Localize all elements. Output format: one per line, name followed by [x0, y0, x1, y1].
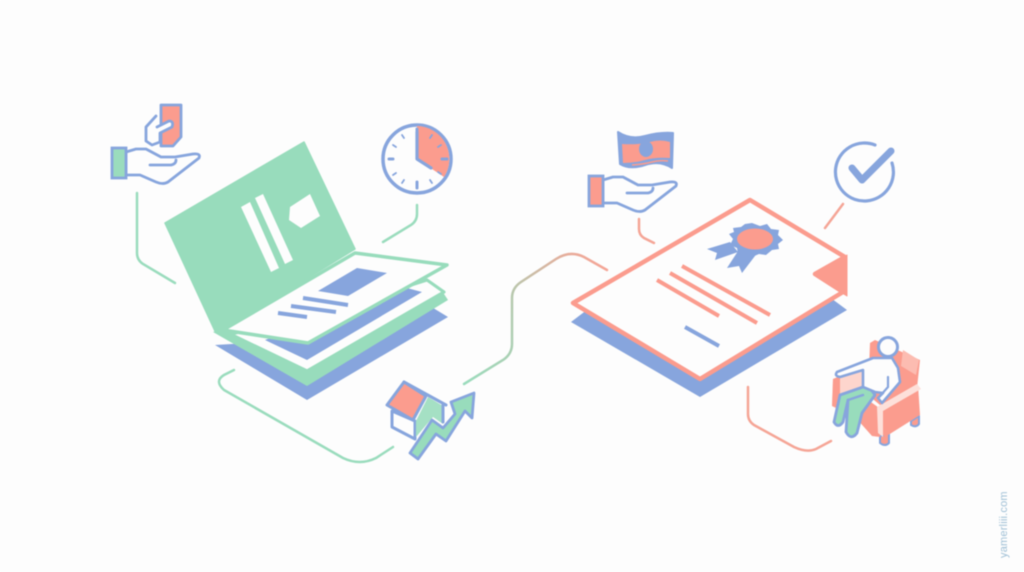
icon: clock — [383, 125, 451, 193]
connector: check to certificate — [825, 204, 843, 228]
open top page — [223, 253, 447, 343]
blue inner block — [265, 287, 422, 360]
certificate blue line — [685, 327, 719, 346]
white inner page — [230, 280, 444, 371]
card — [161, 105, 181, 146]
house wall white — [392, 411, 415, 439]
open palm — [603, 177, 676, 212]
connector: hand to booklet — [137, 193, 175, 283]
chair right arm — [878, 385, 920, 437]
certificate text lines — [657, 266, 770, 323]
chair seat — [856, 400, 882, 437]
cover emblem — [289, 194, 320, 228]
rising arrow — [410, 393, 474, 459]
open palm — [112, 148, 199, 184]
house side lines — [404, 382, 446, 422]
certificate fold — [815, 255, 847, 296]
booklet — [165, 142, 448, 400]
chair left arm — [832, 368, 868, 410]
ribbon tails — [707, 242, 758, 273]
watermark: yamerliii.com — [998, 491, 1010, 558]
connector: booklet to house — [219, 370, 393, 462]
house roof — [387, 382, 426, 420]
green cover — [165, 142, 355, 331]
chair feet — [880, 416, 919, 445]
page text lines — [278, 298, 348, 317]
green page layer — [213, 288, 448, 386]
certificate — [571, 200, 847, 397]
person torso and arm — [836, 358, 900, 403]
base shadow layer — [215, 300, 448, 400]
person legs — [834, 387, 875, 437]
icon: check mark badge — [835, 143, 893, 201]
icon: person in armchair — [832, 338, 921, 445]
house wall green — [416, 397, 443, 437]
connector: clock to booklet — [383, 205, 417, 242]
cover stripes — [241, 194, 293, 272]
seal centre — [737, 228, 773, 250]
icon: house with rising arrow — [387, 382, 474, 459]
connector: money hand to certificate — [639, 219, 654, 243]
chair back — [868, 340, 920, 405]
page image block — [318, 268, 387, 296]
connector: certificate to armchair — [748, 387, 831, 451]
clock hands — [417, 132, 431, 168]
seal rosette — [729, 223, 783, 257]
clock sector — [417, 126, 449, 177]
banknote — [618, 132, 673, 168]
shadow sheet — [571, 290, 847, 397]
check mark — [852, 151, 891, 180]
certificate sheet — [573, 200, 845, 379]
connector: house to certificate — [464, 254, 607, 384]
small hand — [146, 116, 173, 145]
icon: hand holding card — [112, 105, 199, 184]
icon: hand holding money — [589, 132, 676, 212]
person head — [878, 338, 898, 356]
